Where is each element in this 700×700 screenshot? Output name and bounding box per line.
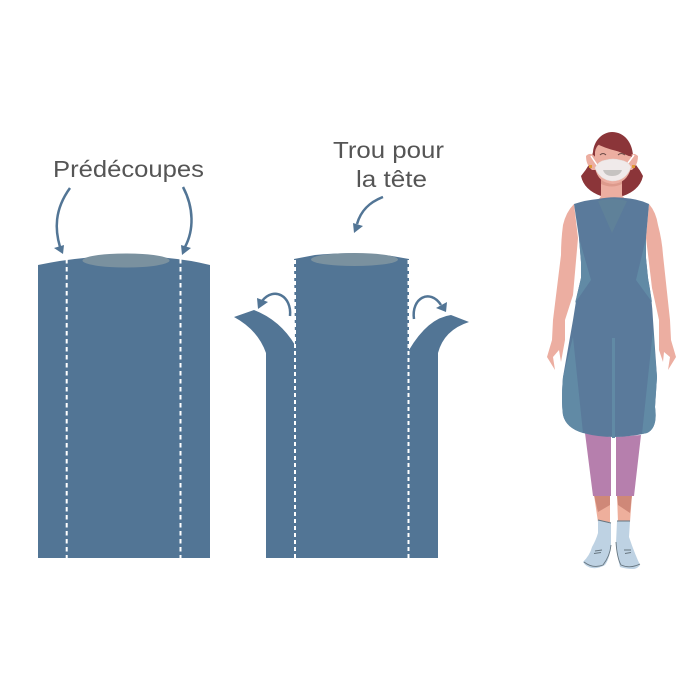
trousers bbox=[585, 433, 641, 496]
arrow: left pre-cut bbox=[54, 188, 70, 254]
gown side and centre panels bbox=[562, 238, 657, 438]
hair fringe bbox=[599, 134, 632, 157]
arrow: left flap fold bbox=[257, 294, 290, 316]
earrings bbox=[589, 165, 635, 168]
right arm and hand bbox=[646, 204, 676, 370]
panel: gown with pre-cuts bbox=[38, 254, 210, 558]
neck hole bbox=[311, 253, 398, 266]
left sock bbox=[583, 520, 611, 568]
arrow: right pre-cut bbox=[181, 187, 192, 255]
face mask bbox=[591, 155, 634, 181]
left arm and hand bbox=[547, 204, 578, 370]
shoe outlines bbox=[584, 520, 640, 567]
gown body and flaps bbox=[234, 253, 469, 558]
heading: Trou pour la tête bbox=[333, 137, 444, 192]
heading: Trou pour la tête: Trou pour bbox=[333, 137, 444, 163]
arrow: right flap fold bbox=[414, 296, 447, 319]
gown body bbox=[38, 254, 210, 558]
panel: gown with folded flaps bbox=[234, 253, 469, 558]
neck hole bbox=[82, 254, 170, 268]
illustration: woman wearing gown and mask bbox=[547, 132, 676, 569]
lower legs bbox=[594, 495, 632, 522]
heading: Trou pour la tête: la tête bbox=[356, 166, 427, 192]
gown bbox=[562, 197, 657, 437]
pre-cut dashed lines bbox=[67, 259, 180, 558]
knee shadows bbox=[594, 495, 632, 513]
pre-cut dashed lines bbox=[295, 260, 408, 558]
gown collar panel bbox=[598, 199, 627, 233]
eyes and nose bbox=[600, 154, 625, 155]
ears bbox=[586, 154, 638, 170]
hair back bbox=[581, 132, 643, 196]
right sock bbox=[616, 521, 640, 569]
face bbox=[595, 144, 631, 184]
neck shadow bbox=[601, 180, 622, 186]
arrow: head hole bbox=[353, 197, 383, 233]
neck bbox=[597, 178, 628, 203]
heading: Prédécoupes: Prédécoupes bbox=[53, 156, 204, 182]
